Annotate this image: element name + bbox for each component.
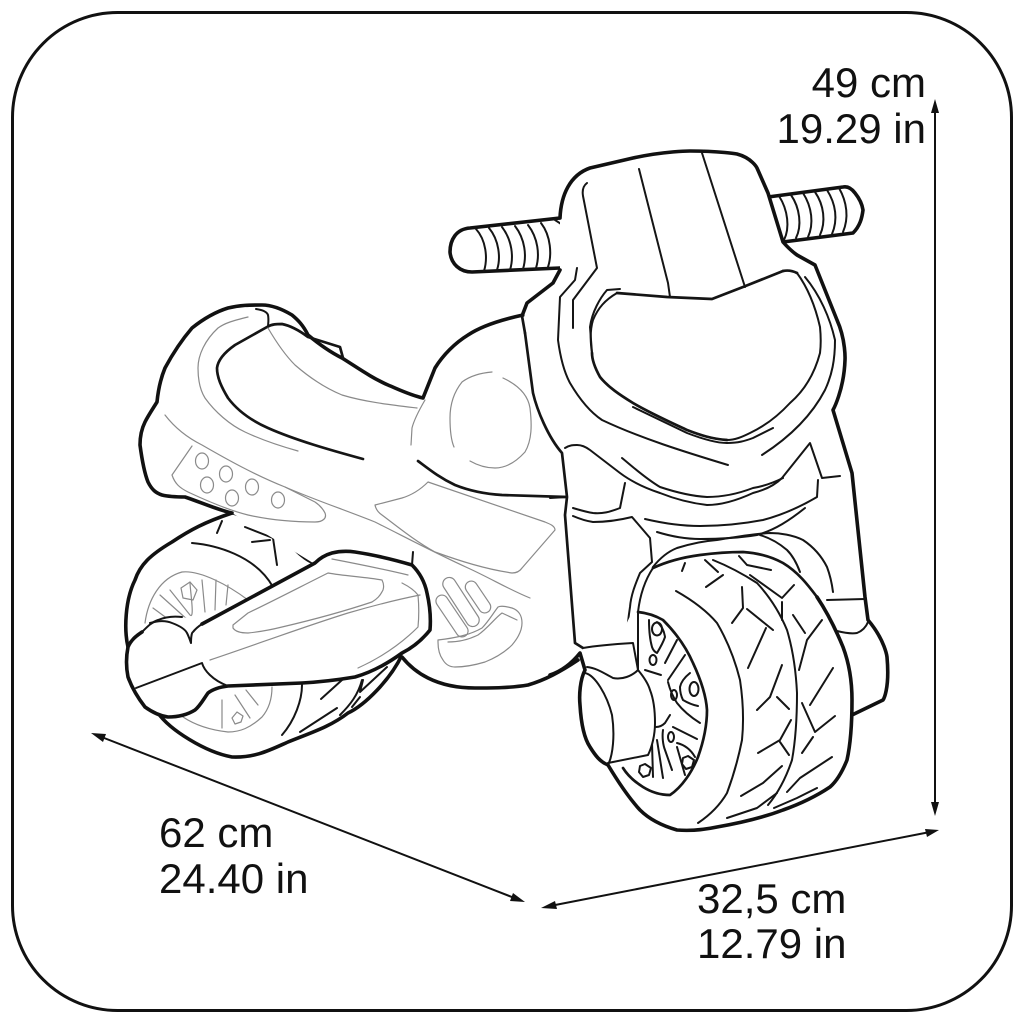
fuel tank circle	[450, 372, 531, 468]
right handlebar grip	[767, 187, 863, 242]
windscreen and fairing details	[558, 153, 840, 640]
tread marks	[682, 556, 835, 818]
height label: 19.29 in	[777, 105, 926, 152]
length label: 62 cm	[159, 809, 273, 856]
height label: 49 cm	[812, 59, 926, 106]
side vents	[434, 593, 470, 639]
vent panel with holes	[172, 446, 326, 522]
wheel rim	[623, 612, 707, 795]
front fork and fairing base	[522, 151, 888, 715]
length label: 24.40 in	[159, 855, 308, 902]
height arrow	[931, 99, 939, 816]
foot rest	[126, 551, 430, 717]
seat and body	[140, 305, 600, 688]
front wheel	[590, 552, 852, 830]
width arrow	[541, 829, 939, 909]
width label: 12.79 in	[697, 920, 846, 967]
left handlebar grip	[450, 218, 580, 272]
illustration: ride-on motorbike	[126, 151, 888, 830]
rear wheel	[126, 513, 402, 757]
fork end and hub cap	[550, 612, 655, 765]
length arrow	[91, 733, 525, 902]
width label: 32,5 cm	[697, 875, 846, 922]
rear fender at right	[827, 599, 868, 633]
seat pad	[217, 324, 363, 459]
